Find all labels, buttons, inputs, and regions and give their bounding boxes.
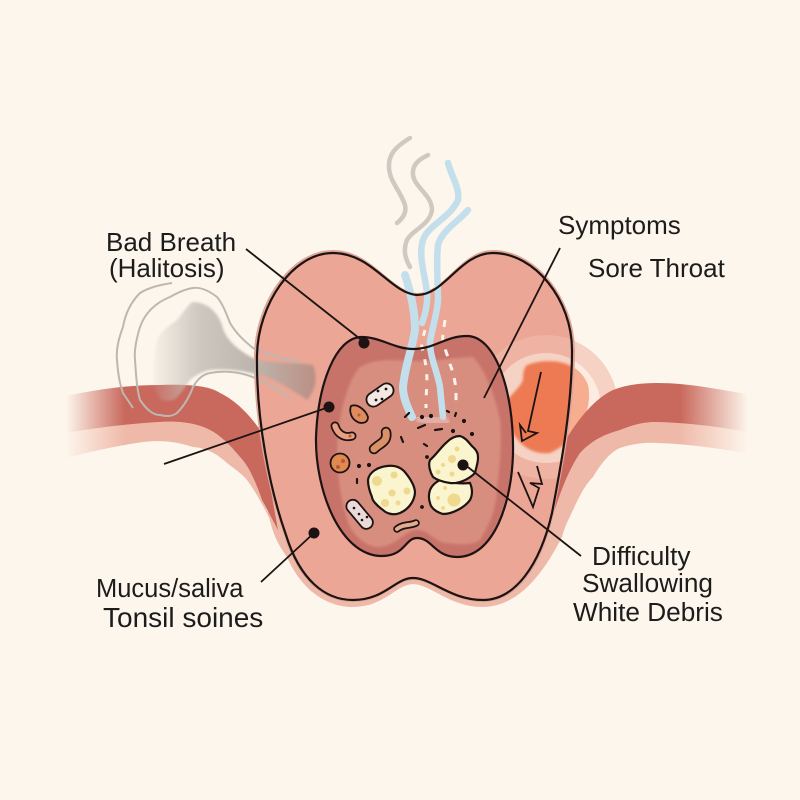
label: Symptoms, Sore Throat: Sore Throat	[588, 253, 726, 283]
halo: outer inflammation ring	[474, 335, 618, 479]
outlines	[257, 253, 572, 600]
bacteria	[330, 381, 416, 532]
sore throat arrow	[518, 372, 542, 507]
label: Mucus/saliva, Tonsil stones: Tonsil soines	[103, 602, 263, 633]
label: Mucus/saliva, Tonsil stones	[96, 575, 263, 633]
tissue band: right	[545, 383, 748, 560]
debris specks	[357, 411, 474, 508]
body: outer tonsil area	[254, 250, 575, 602]
label: Difficulty Swallowing White Debris: Difficulty	[592, 541, 691, 571]
breath vapour: grey wisps	[389, 138, 432, 267]
breath vapour: blue wisps	[403, 163, 468, 422]
leader lines	[164, 248, 581, 582]
label: Bad Breath (Halitosis)	[106, 227, 236, 283]
label: Mucus/saliva, Tonsil stones: Mucus/saliva	[96, 575, 244, 603]
label: Difficulty Swallowing White Debris: Swallowing	[582, 568, 713, 598]
bacteria spots	[336, 388, 387, 521]
tissue underlay: pale lower body	[262, 480, 570, 607]
tonsil stones: white debris	[368, 436, 478, 514]
stone speckles	[372, 446, 460, 510]
smell cloud: grey breath plume	[117, 283, 316, 416]
label: Bad Breath (Halitosis): Bad Breath	[106, 227, 236, 257]
white dashed vapour	[422, 320, 456, 408]
label: Symptoms, Sore Throat	[558, 210, 726, 283]
label: Difficulty Swallowing White Debris: White Debris	[573, 597, 723, 627]
sore throat inflamed patch	[496, 335, 571, 479]
inner tonsil crypt	[316, 336, 513, 557]
label: Difficulty Swallowing White Debris	[573, 541, 723, 627]
tissue band: left	[66, 385, 290, 560]
label: Bad Breath (Halitosis): (Halitosis)	[109, 253, 225, 283]
label: Symptoms, Sore Throat: Symptoms	[558, 210, 681, 240]
leader dots	[308, 338, 468, 538]
